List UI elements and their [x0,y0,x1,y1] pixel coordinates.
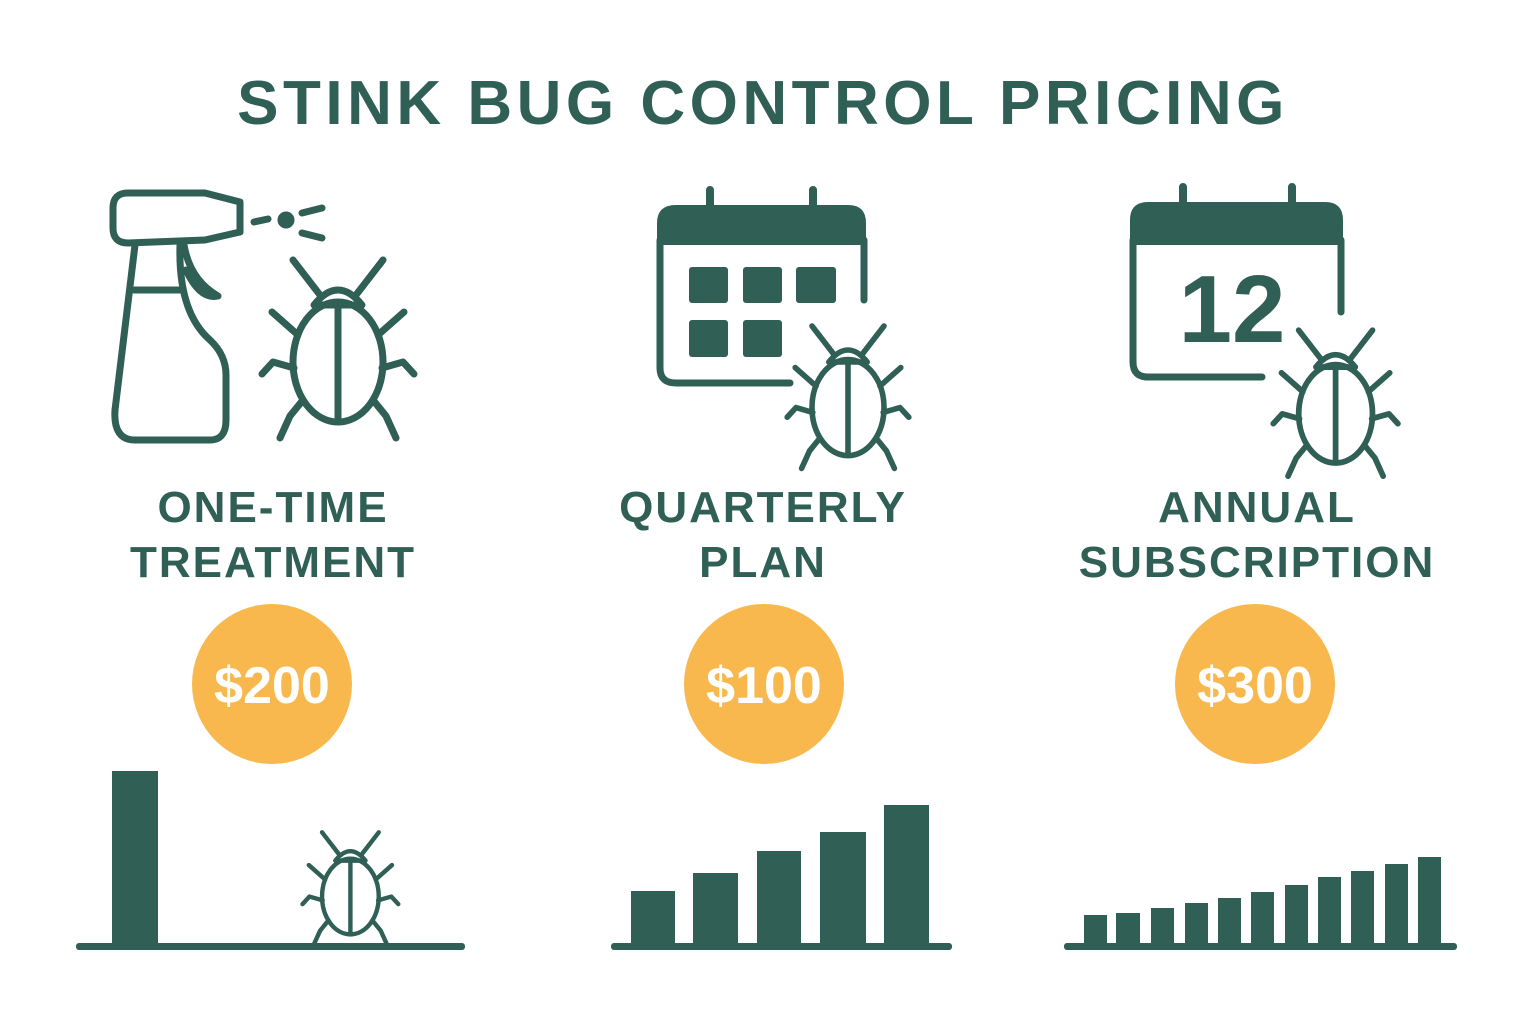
price circle [1175,604,1335,764]
price circle: $200 [214,657,330,715]
icon: small bug [303,832,398,944]
label: ONE-TIME [157,483,389,532]
price circle: $300 [1197,657,1313,715]
icon: bug [262,260,414,438]
icon: bug [1273,330,1398,476]
panel: quarterly plan: PLAN [699,538,827,587]
panel: quarterly plan [611,190,952,950]
panel: annual subscription [1064,187,1457,950]
bar chart [1064,857,1457,950]
icon: spray bottle [113,193,322,440]
label: ANNUAL [1158,483,1356,532]
price circle: $100 [706,657,822,715]
bar chart [76,771,465,950]
icon: calendar 12: 12 [1179,256,1285,363]
icon: calendar 12 [1130,187,1343,377]
icon: bug [787,326,909,468]
bar chart [611,805,952,950]
panel: annual subscription: SUBSCRIPTION [1079,538,1435,587]
title: STINK BUG CONTROL PRICING [237,69,1289,138]
price circle [192,604,352,764]
panel: one-time treatment: TREATMENT [130,538,416,587]
price circle [684,604,844,764]
panel: one-time treatment [76,193,465,950]
label: QUARTERLY [619,483,907,532]
icon: calendar [657,190,866,383]
